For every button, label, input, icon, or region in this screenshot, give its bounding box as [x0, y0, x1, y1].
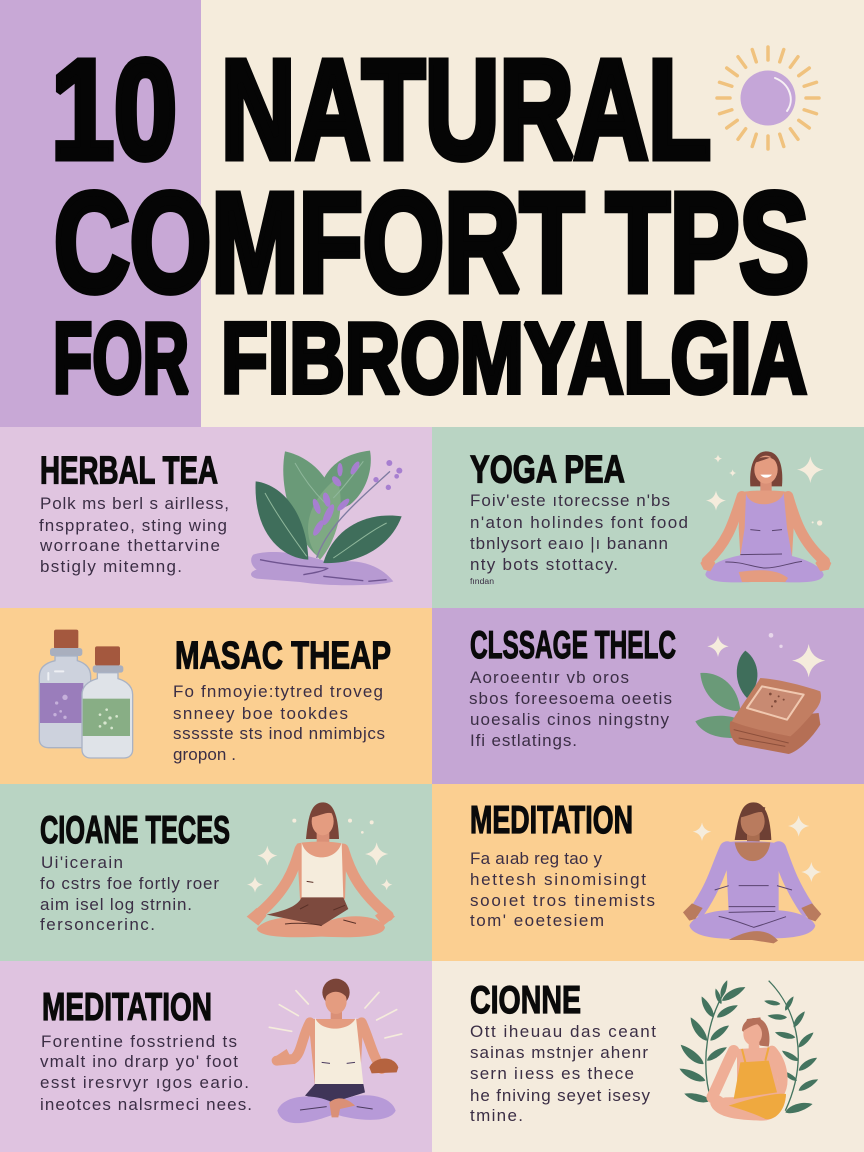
panel: herbal tea: [0, 427, 432, 608]
text block: herbal tea: Polk ms berl s airlless,: [40, 494, 229, 513]
text block: cionne: he fniving seyet isesy: [470, 1086, 650, 1105]
text block: cionne: Ott iheuau das ceant: [470, 1022, 656, 1041]
heading: meditation: MEDITATION: [42, 986, 212, 1029]
text block: herbal tea: fnspprateo, sting wing: [39, 516, 227, 535]
icon: woman meditating in cream top: [247, 802, 395, 937]
text block: meditation: hettesh sinomisingt: [470, 870, 646, 889]
text block: massage: ssssste sts inod nmimbjcs: [173, 724, 385, 743]
text block: meditation: tom' eoetesiem: [470, 911, 604, 930]
text block: clssage: [469, 668, 672, 750]
text block: cioane: fersoncerinc.: [40, 915, 155, 934]
title: 10: [51, 30, 177, 188]
text block: meditation: esst iresrvyr ıgos eario.: [40, 1073, 249, 1092]
panel: cionne: [432, 961, 864, 1152]
text block: herbal tea: bstigly mitemng.: [40, 557, 182, 576]
text block: cionne: [470, 1022, 656, 1125]
heading: cioane teces: CIOANE TECES: [40, 809, 230, 852]
heading: cionne: CIONNE: [470, 979, 581, 1022]
icon: herbs on cloth: [251, 451, 402, 585]
heading: herbal tea: HERBAL TEA: [40, 450, 218, 492]
icon: woman meditating in lilac sweater: [683, 802, 821, 943]
text block: cioane: [40, 853, 219, 934]
text block: massage: [173, 682, 385, 764]
heading: clssage thelc: CLSSAGE THELC: [470, 624, 676, 667]
title: FOR: [53, 302, 189, 414]
text block: clssage: Aoroeentır vb oros: [470, 668, 629, 687]
text block: yoga: [470, 491, 688, 586]
text block: meditation: vmalt ino drarp yo' foot: [40, 1052, 238, 1071]
panel: massage: [0, 608, 432, 784]
text block: massage: Fo fnmoyie:tytred troveg: [173, 682, 383, 701]
text block: cioane: fo cstrs foe fortly roer: [40, 874, 219, 893]
icon: woman with massage stone: [269, 979, 402, 1123]
text block: meditation: [40, 1032, 252, 1114]
text block: clssage: uoesalis cinos ningstny: [470, 710, 670, 729]
panel: meditation orange: [432, 784, 864, 961]
icon: oil bottles: [39, 630, 133, 758]
icon: woman in yoga pose: [700, 451, 831, 582]
text block: cionne: tmine.: [470, 1106, 523, 1125]
panel: cioane teces: [0, 784, 432, 961]
text block: yoga: nty bots stottacy.: [470, 555, 618, 574]
panel: yoga: [432, 427, 864, 608]
text block: herbal tea: [39, 494, 229, 576]
icon: sun: [717, 47, 819, 149]
text block: yoga: Foiv'este ıtorecsse n'bs: [470, 491, 670, 510]
text block: cioane: aim isel log strnin.: [40, 895, 192, 914]
heading: masac theap: MASAC THEAP: [175, 634, 391, 678]
text block: cioane: Ui'icerain: [41, 853, 123, 872]
text block: meditation: [470, 849, 655, 930]
text block: yoga: tbnlysort eaıo |ı banann: [470, 534, 668, 553]
text block: massage: snneey boe tookdes: [173, 704, 348, 723]
heading: meditation: MEDITATION: [470, 799, 633, 842]
text block: herbal tea: worroane thettarvine: [39, 536, 220, 555]
panel: meditation lilac: [0, 961, 432, 1152]
text block: cionne: sainas mstnjer ahenr: [470, 1043, 648, 1062]
heading: yoga pea: YOGA PEA: [470, 448, 625, 492]
text block: meditation: ineotces nalsrmeci nees.: [40, 1095, 252, 1114]
text block: massage: gropon .: [173, 745, 236, 764]
text block: yoga: fından: [470, 577, 494, 586]
panel: clssage: [432, 608, 864, 784]
header panel: [0, 0, 864, 427]
icon: folded towel with leaves: [695, 633, 825, 754]
text block: yoga: n'aton holindes font food: [470, 513, 688, 532]
text block: cionne: sern iıess es thece: [470, 1064, 634, 1083]
text block: clssage: sbos foreesoema oeetis: [469, 689, 672, 708]
icon: woman in laurel wreath: [678, 979, 819, 1121]
text block: meditation: Forentine fosstriend ts: [41, 1032, 237, 1051]
title: COMFORT: [54, 163, 584, 321]
text block: clssage: Ifi estlatings.: [470, 731, 577, 750]
text block: meditation: Fa aıab reg tao y: [470, 849, 602, 868]
title: [51, 30, 809, 414]
text block: meditation: sooıet tros tinemists: [470, 891, 655, 910]
